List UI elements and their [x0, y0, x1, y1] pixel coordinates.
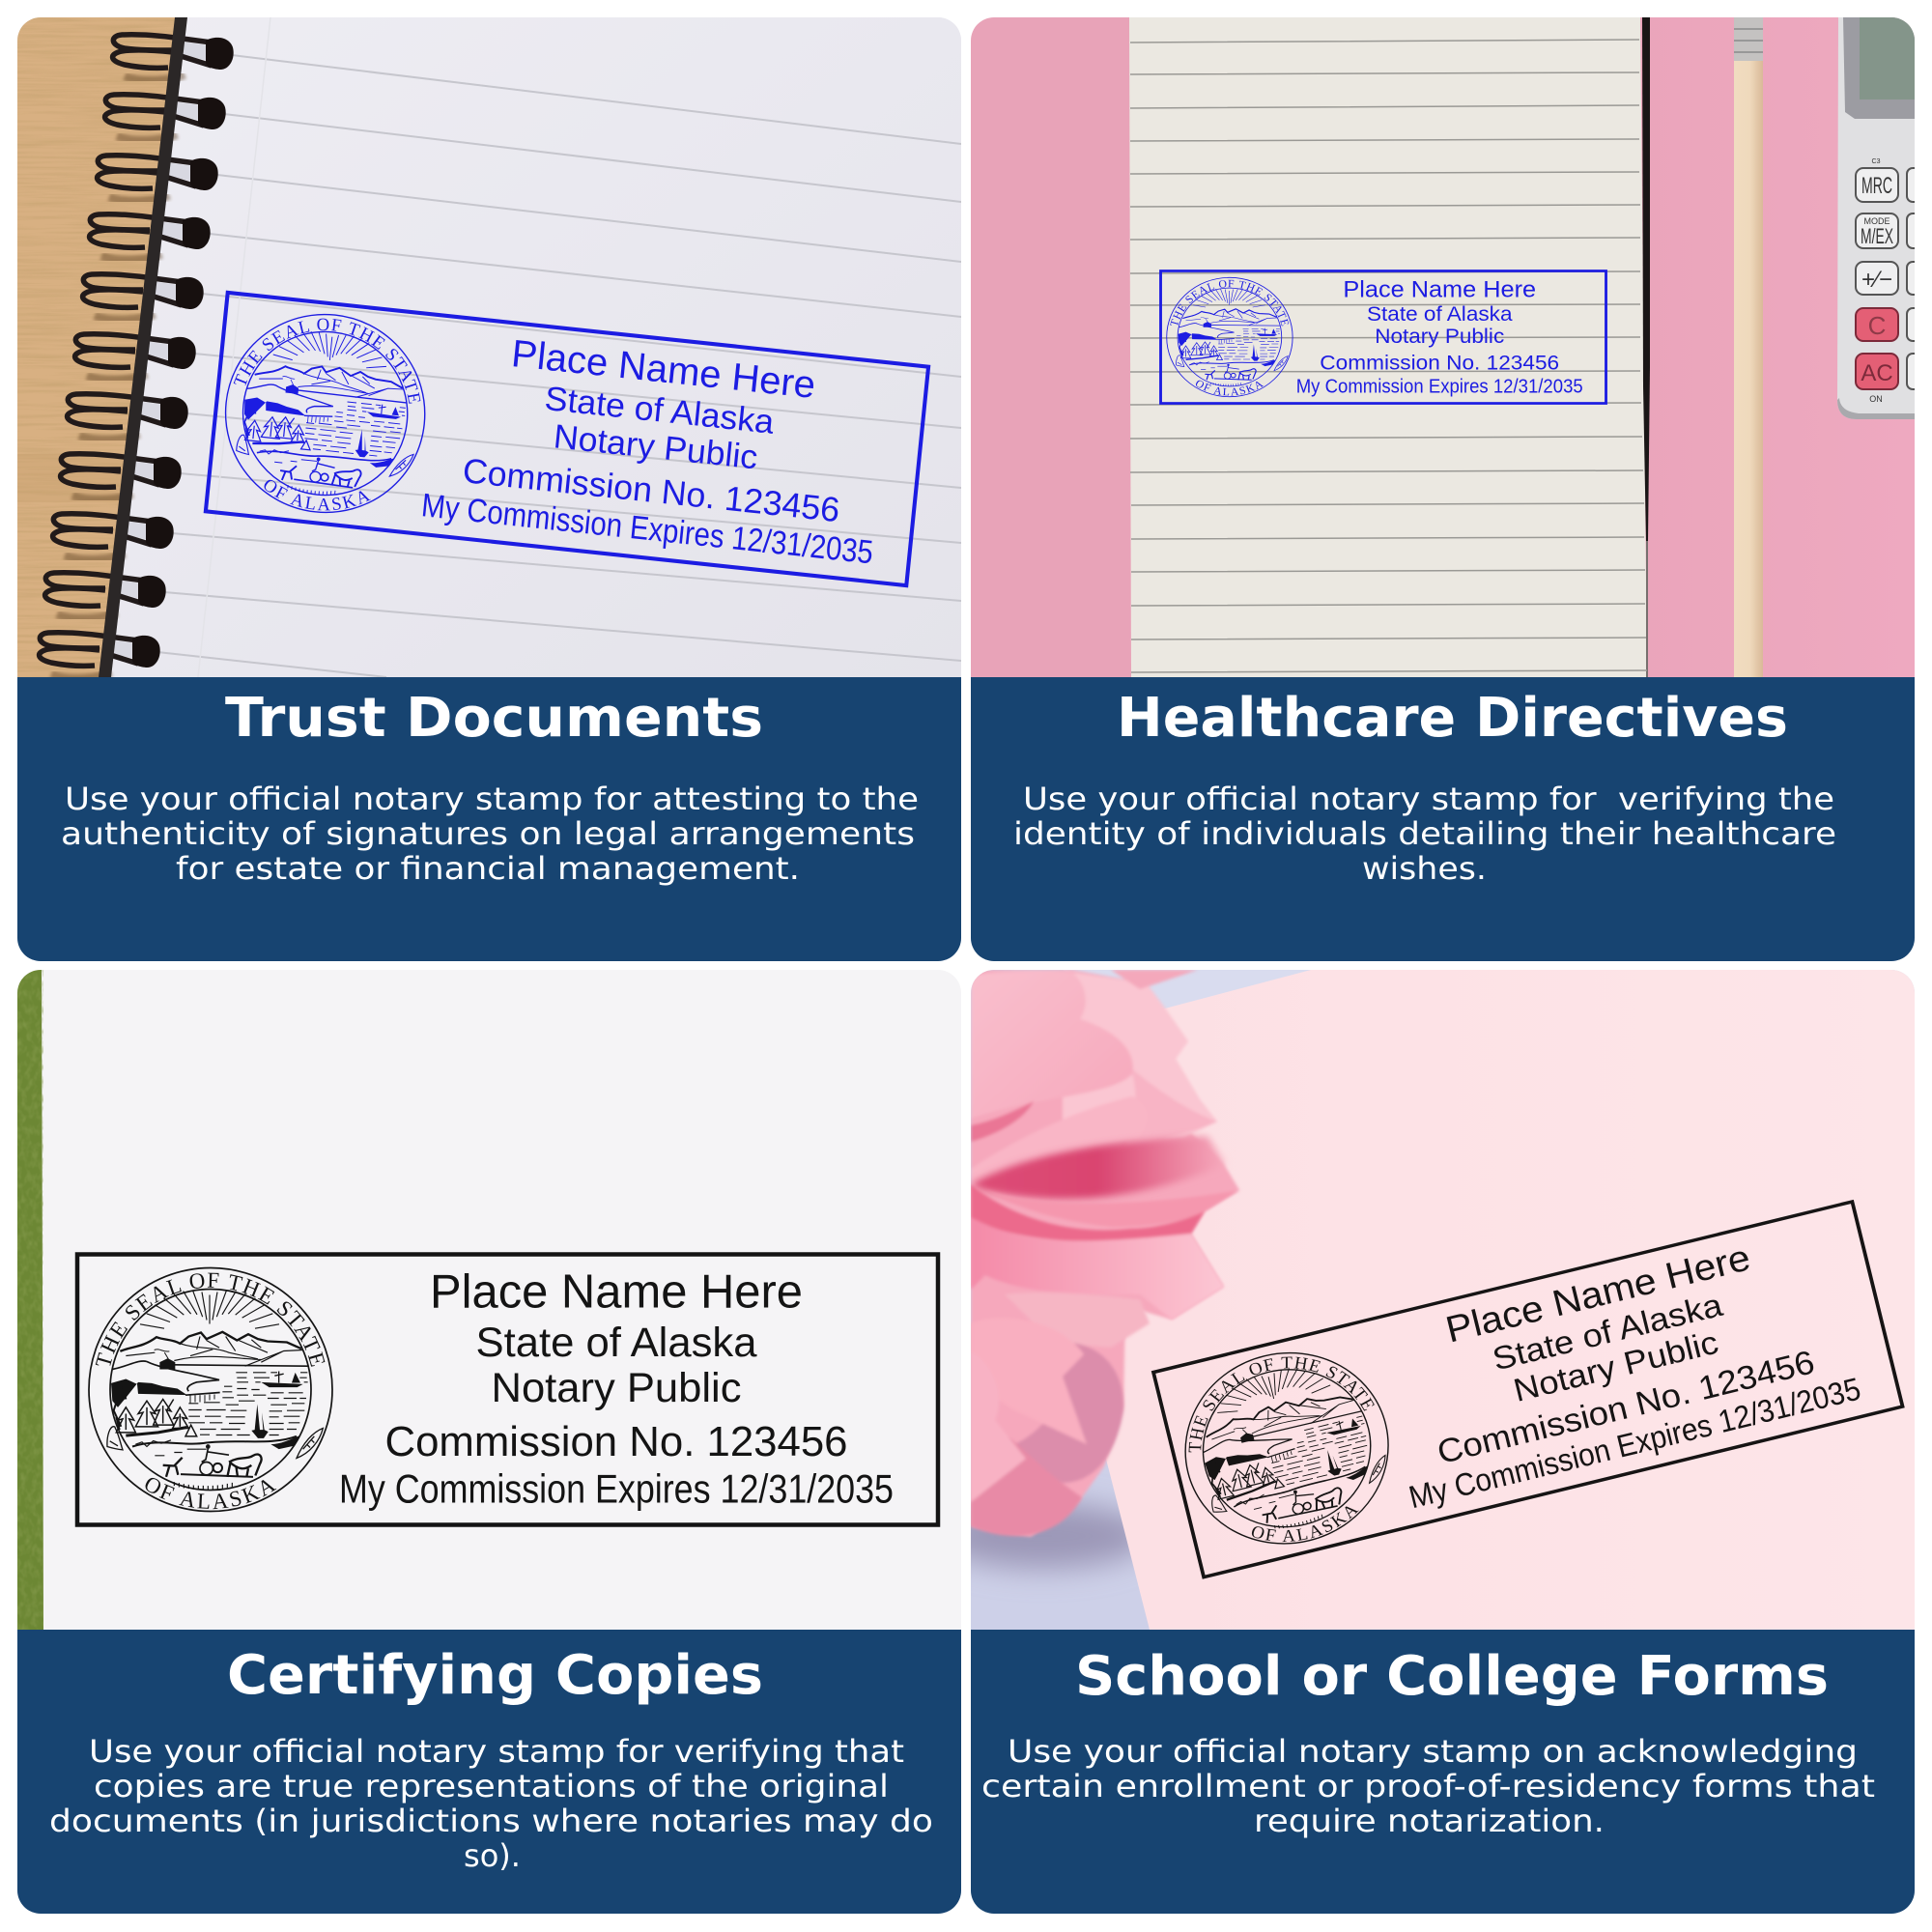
stamp text: Commission No. 123456 — [1434, 1343, 1818, 1471]
stamp text: My Commission Expires 12/31/2035 — [1406, 1372, 1864, 1516]
wood desk — [17, 17, 176, 677]
panel: school or college forms — [971, 970, 1915, 1914]
stamp text: My Commission Expires 12/31/2035 — [1296, 376, 1583, 397]
calculator: +⁄− — [1861, 267, 1892, 293]
caption card — [971, 677, 1915, 961]
ruled paper lines — [157, 55, 961, 677]
stamp impression: blue tilted — [203, 290, 931, 587]
description: so). — [464, 1837, 521, 1874]
description: copies are true representations of the original — [94, 1768, 889, 1804]
stamp text: Commission No. 123456 — [1320, 351, 1559, 374]
stamp text: Notary Public — [552, 417, 759, 476]
stamp text: Commission No. 123456 — [384, 1418, 848, 1465]
stamp text: State of Alaska — [1490, 1288, 1726, 1378]
calculator: ON — [1869, 394, 1883, 404]
description: Use your official notary stamp for verifying the — [1023, 781, 1834, 817]
stamp text: State of Alaska — [543, 380, 776, 441]
description — [1013, 781, 1836, 887]
stamp text: My Commission Expires 12/31/2035 — [420, 487, 875, 571]
pencil — [1734, 17, 1763, 677]
caption card — [17, 677, 961, 961]
panel: trust documents — [17, 17, 961, 961]
state seal — [1184, 1352, 1389, 1545]
caption card — [17, 1630, 961, 1914]
photo: pink desk with notepad, pencil and calculator — [971, 17, 1920, 677]
calculator: M/EX — [1861, 224, 1893, 248]
heading: Trust Documents — [225, 687, 763, 750]
state seal: THE SEAL OF THE STATE — [234, 319, 421, 404]
panel: healthcare directives — [971, 17, 1915, 961]
calculator: MODE — [1864, 216, 1889, 226]
calculator: C3 — [1872, 158, 1881, 165]
stamp impression: black tilted — [1151, 1200, 1905, 1579]
state seal — [1166, 276, 1293, 398]
description: documents (in jurisdictions where notaries may do — [49, 1803, 933, 1839]
stamp text: Place Name Here — [1343, 277, 1536, 302]
heading: School or College Forms — [1075, 1645, 1829, 1708]
notepad — [1129, 17, 1647, 677]
state seal: OF ALASKA — [1252, 1506, 1359, 1542]
calculator: C — [1868, 311, 1886, 340]
stamp text — [1368, 1219, 1864, 1516]
stamp impression: blue straight — [1159, 270, 1607, 405]
calculator: MRC — [1861, 173, 1892, 199]
heading: Healthcare Directives — [1117, 687, 1788, 750]
description: Use your official notary stamp for verifying that — [89, 1733, 904, 1770]
stamp text: State of Alaska — [1367, 302, 1514, 326]
stamp text: Notary Public — [1510, 1325, 1721, 1409]
pink sheet — [1063, 970, 1915, 1630]
state seal: THE SEAL OF THE STATE — [95, 1273, 325, 1367]
description: require notarization. — [1254, 1803, 1605, 1839]
state seal — [88, 1267, 333, 1513]
state seal: THE SEAL OF THE STATE — [1170, 280, 1289, 327]
stamp text: Place Name Here — [430, 1265, 803, 1318]
shadow under flower — [937, 1503, 1150, 1569]
state seal: THE SEAL OF THE STATE — [1188, 1356, 1375, 1453]
green cover edge — [17, 970, 43, 1630]
stamp text — [423, 340, 872, 563]
description: wishes. — [1362, 850, 1487, 887]
ruled lines — [1130, 40, 1647, 672]
stamp text: Place Name Here — [1442, 1237, 1754, 1350]
description — [981, 1733, 1875, 1839]
state seal: OF ALASKA — [1196, 381, 1264, 396]
description: Use your official notary stamp for attesting to the — [65, 781, 919, 817]
caption card — [971, 1630, 1915, 1914]
state seal: OF ALASKA — [145, 1478, 276, 1509]
description: for estate or financial management. — [176, 850, 800, 887]
panel: certifying copies — [17, 970, 961, 1914]
stamp text: Commission No. 123456 — [461, 451, 841, 529]
stamp text: State of Alaska — [475, 1320, 757, 1366]
calculator: AC — [1861, 360, 1893, 386]
description — [61, 781, 919, 887]
heading: Certifying Copies — [227, 1644, 763, 1707]
stamp impression: black straight — [75, 1252, 941, 1527]
photo: spiral notebook on wood — [17, 17, 961, 678]
state seal: OF ALASKA — [265, 479, 371, 510]
stamp text: My Commission Expires 12/31/2035 — [339, 1466, 894, 1511]
stamp text: Notary Public — [491, 1365, 742, 1411]
stamp text — [1296, 277, 1583, 397]
stamp text: Place Name Here — [509, 332, 817, 407]
calculator — [1837, 17, 1920, 419]
description: identity of individuals detailing their healthcare — [1013, 815, 1836, 852]
description: authenticity of signatures on legal arrangements — [61, 815, 915, 852]
peony flower — [971, 970, 1239, 1537]
stamp text — [339, 1265, 894, 1511]
spiral binding rings — [40, 35, 234, 678]
state seal — [224, 313, 425, 514]
binder strip — [99, 17, 187, 677]
description — [49, 1733, 933, 1874]
photo: white sheet on green cover — [17, 970, 961, 1630]
photo: pink paper with peony — [937, 970, 1915, 1630]
description: certain enrollment or proof-of-residency forms that — [981, 1768, 1875, 1804]
description: Use your official notary stamp on acknowledging — [1008, 1733, 1858, 1770]
stamp text: Notary Public — [1375, 325, 1504, 348]
